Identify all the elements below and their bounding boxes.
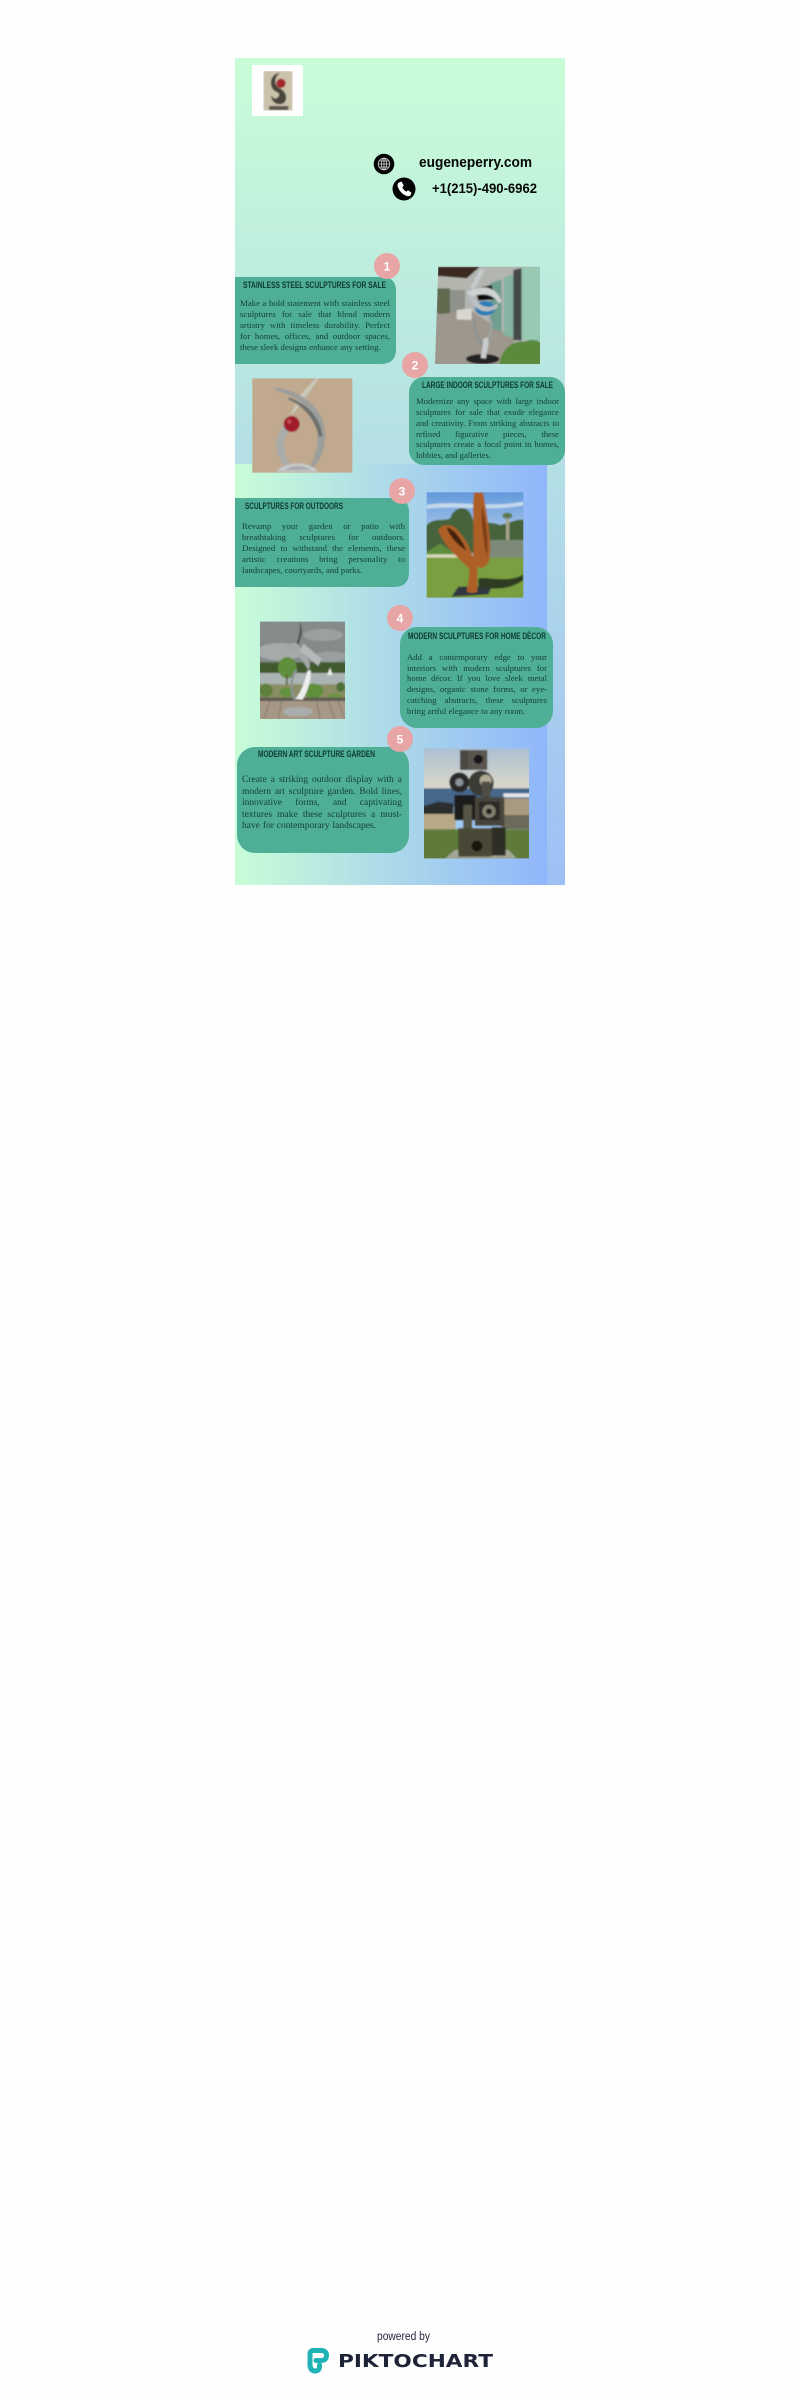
section 4 panel (400, 627, 553, 728)
photo: silver sculpture on lakeside deck (257, 620, 347, 720)
section 1 body: Make a bold statement with stainless steel (240, 298, 390, 308)
number badge 5: 5 (397, 732, 404, 746)
section 3 body: Revamp your garden or patio with (242, 521, 405, 531)
section 4 body: Add a contemporary edge to your (407, 652, 547, 662)
section 2 panel (409, 377, 565, 465)
section 2 body: and creativity. From striking abstracts to (416, 418, 559, 428)
section 5 body: have for contemporary landscapes. (242, 821, 376, 831)
section 2 body: Modernize any space with large indoor (416, 396, 559, 406)
number badge 2: 2 (412, 358, 419, 372)
section 1 body (240, 298, 390, 354)
section 2 body: lobbies, and galleries. (416, 450, 491, 460)
number badge 5 (387, 726, 413, 752)
section 3 body: Designed to withstand the elements, these (242, 543, 405, 553)
section 2 heading: LARGE INDOOR SCULPTURES FOR SALE (422, 380, 553, 391)
number badge 4 (387, 605, 413, 631)
icon: phone (392, 178, 416, 200)
section 2 body: sculptures create a focal point in homes, (416, 439, 559, 449)
section 4 body: interiors with modern sculptures for (407, 663, 547, 673)
section 5 body (242, 774, 402, 836)
section 5 panel (237, 747, 409, 853)
section 5 body: modern art sculpture garden. Bold lines, (242, 786, 402, 796)
number badge 4: 4 (397, 612, 404, 626)
section 3 body (242, 521, 412, 577)
number badge 1 (374, 253, 400, 279)
section 3 panel (235, 498, 412, 587)
section 4 body (407, 652, 547, 720)
section 1 body: artistry with timeless durability. Perfect (240, 320, 390, 330)
section 1 body: for homes, offices, and outdoor spaces, (240, 331, 390, 341)
infographic background panel (235, 58, 565, 885)
section 5 body: innovative forms, and captivating (242, 798, 402, 808)
section 5 body: textures make these sculptures a must- (242, 810, 402, 820)
photo: rust orange outdoor sculpture (425, 491, 525, 599)
section 2 body (416, 396, 559, 462)
section 1 body: these sleek designs enhance any setting. (240, 342, 381, 352)
icon: piktochart logo mark (310, 2350, 326, 2371)
photo: dark geometric sculpture by the sea (422, 747, 531, 860)
powered by text: powered by (377, 2331, 430, 2343)
section 2 body: refined figurative pieces, these (416, 429, 559, 439)
photo: silver arc sculpture with red sphere (250, 377, 355, 475)
icon: globe (374, 154, 394, 174)
section 4 body: designs, organic stone forms, or eye- (407, 684, 547, 694)
section 3 body: artistic creations bring personality to (242, 554, 405, 564)
logo (252, 65, 303, 116)
section 3 body: breathtaking sculptures for outdoors. (242, 532, 405, 542)
section 4 body: bring artful elegance to any room. (407, 706, 525, 716)
piktochart wordmark: PIKTOCHART (338, 2351, 494, 2372)
section 1 heading: STAINLESS STEEL SCULPTURES FOR SALE (243, 280, 386, 291)
section 4 body: catching abstracts, these sculptures (407, 695, 547, 705)
section 4 heading: MODERN SCULPTURES FOR HOME DÉCOR (408, 631, 546, 642)
number badge 2 (402, 352, 428, 378)
section 4 body: home décor. If you love sleek metal (407, 673, 547, 683)
section 1 panel (235, 277, 396, 364)
number badge 3 (389, 478, 415, 504)
number badge 1: 1 (384, 260, 391, 274)
section 5 body: Create a striking outdoor display with a (242, 775, 402, 785)
section 2 body: sculptures for sale that exude elegance (416, 407, 559, 417)
photo: stainless steel sculpture on patio (433, 265, 542, 365)
section 3 heading: SCULPTURES FOR OUTDOORS (245, 501, 343, 512)
phone number text: +1(215)-490-6962 (432, 180, 537, 196)
section 5 heading: MODERN ART SCULPTURE GARDEN (258, 749, 375, 760)
section 1 body: sculptures for sale that blend modern (240, 309, 390, 319)
number badge 3: 3 (399, 484, 406, 498)
website text: eugeneperry.com (419, 154, 532, 171)
section 3 body: landscapes, courtyards, and parks. (242, 564, 362, 574)
